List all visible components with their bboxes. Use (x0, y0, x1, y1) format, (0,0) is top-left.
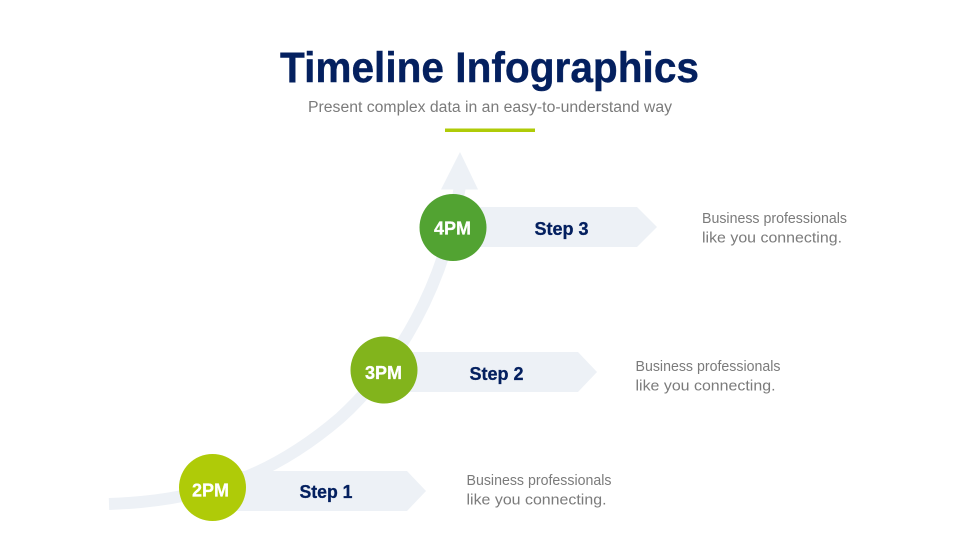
description: step 3: Business professionals (702, 211, 847, 227)
time label: 2PM: 2PM (192, 480, 229, 500)
time label: 3PM: 3PM (365, 362, 402, 383)
description: step 2: Business professionals (636, 359, 780, 375)
banner: step 3 (475, 207, 657, 247)
step 3 group (420, 194, 847, 261)
step 1 group (179, 454, 612, 521)
subtitle: Present complex data in an easy-to-understand way (308, 99, 672, 116)
banner: step 2 (405, 352, 597, 392)
time label: 4PM: 4PM (434, 218, 471, 238)
step 2 group (350, 336, 780, 404)
banner: step 1 (235, 471, 426, 511)
circle: 2PM (179, 454, 246, 521)
step label: Step 1: Step 1 (300, 481, 352, 502)
title: Timeline Infographics (280, 44, 699, 92)
description: step 3: like you connecting. (702, 230, 842, 246)
description: step 1: like you connecting. (466, 492, 606, 508)
circle: 4PM (420, 194, 486, 261)
description: step 1: Business professionals (466, 473, 612, 489)
step label: Step 3: Step 3 (534, 218, 588, 239)
description: step 2: like you connecting. (636, 378, 776, 394)
step label: Step 2: Step 2 (470, 363, 524, 384)
circle: 3PM (350, 336, 418, 404)
accent underline (445, 128, 535, 132)
growth arrow (109, 152, 478, 504)
